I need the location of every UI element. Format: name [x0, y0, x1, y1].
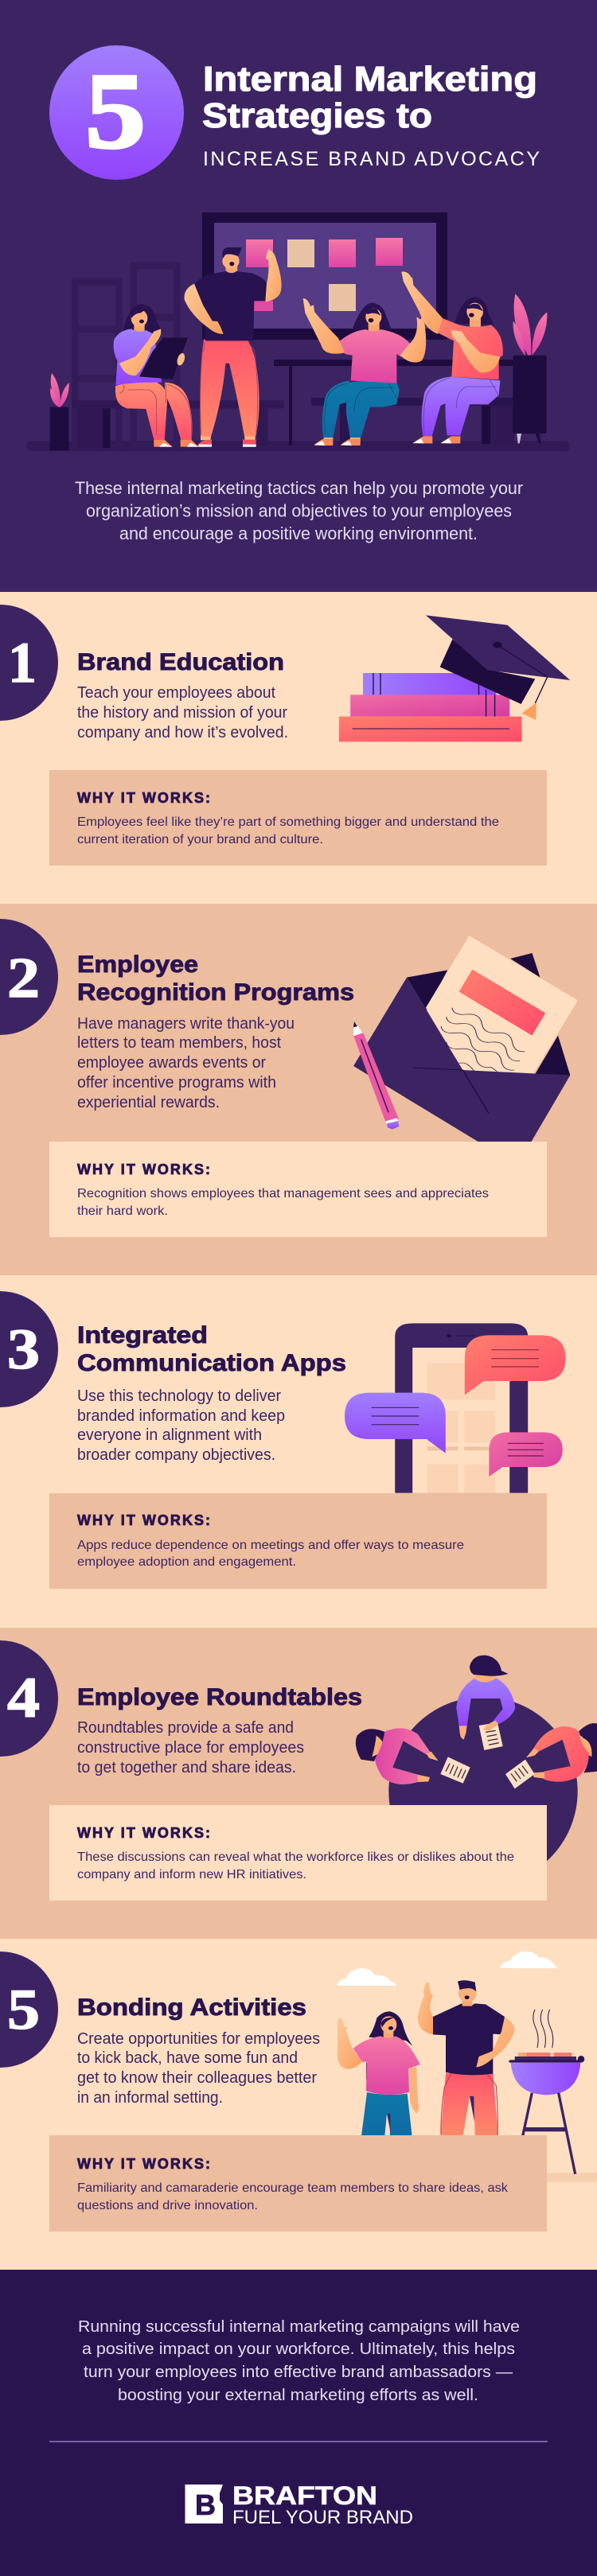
left person — [356, 1728, 470, 1784]
why it works box — [49, 1805, 547, 1901]
why it works box: WHY IT WORKS: — [77, 790, 210, 806]
illustration: team meeting — [26, 212, 570, 451]
top person — [456, 1656, 515, 1750]
panel: strategy 1 brand education — [0, 592, 597, 904]
floor — [26, 441, 570, 451]
why it works box — [49, 1493, 547, 1589]
number badge 2 — [0, 919, 58, 1035]
why it works box: employee adoption and engagement. — [77, 1555, 296, 1569]
logo: Brafton: BRAFTON — [232, 2481, 377, 2510]
body text: offer incentive programs with — [77, 1074, 276, 1091]
body text: branded information and keep — [77, 1407, 285, 1425]
standing man — [184, 247, 282, 447]
heading: Recognition Programs — [77, 979, 354, 1006]
panel: strategy 4 employee roundtables — [0, 1628, 597, 1939]
middle woman — [303, 298, 426, 446]
heading: Brand Education — [77, 649, 284, 675]
closing text — [78, 2317, 520, 2404]
number badge 5: 5 — [7, 1978, 40, 2041]
why it works box: current iteration of your brand and culture. — [77, 833, 323, 846]
logo: Brafton: FUEL YOUR BRAND — [232, 2507, 413, 2528]
body text — [77, 684, 288, 741]
title: Internal Marketing — [203, 60, 537, 99]
large plant — [513, 294, 547, 443]
why it works box — [49, 2135, 547, 2232]
man — [418, 1980, 515, 2136]
intro text: organization’s mission and objectives to your employees — [86, 501, 512, 520]
body text: experiential rewards. — [77, 1094, 220, 1111]
why it works box: WHY IT WORKS: — [77, 2156, 210, 2172]
why it works box: questions and drive innovation. — [77, 2199, 258, 2212]
body text: Create opportunities for employees — [77, 2030, 320, 2048]
intro text: These internal marketing tactics can help you promote your — [75, 478, 523, 498]
title: Strategies to — [202, 96, 432, 135]
number badge 3: 3 — [7, 1317, 40, 1381]
closing text: boosting your external marketing efforts as well. — [118, 2386, 478, 2404]
seated woman with tablet — [114, 304, 199, 447]
body text: letters to team members, host — [77, 1034, 281, 1052]
body text: constructive place for employees — [77, 1739, 304, 1757]
body text: the history and mission of your — [77, 704, 287, 722]
why it works box: Recognition shows employees that management sees and appreciates — [77, 1187, 489, 1200]
closing text: Running successful internal marketing campaigns will have — [78, 2317, 520, 2336]
table and bench — [274, 360, 514, 366]
grill — [509, 2010, 584, 2174]
right person — [505, 1723, 597, 1788]
why it works box — [49, 770, 547, 866]
number badge 1: 1 — [8, 631, 37, 695]
why it works box: WHY IT WORKS: — [77, 1512, 210, 1528]
body text: broader company objectives. — [77, 1446, 275, 1464]
illustration: barbecue with colleagues — [337, 1951, 597, 2182]
body text: get to know their colleagues better — [77, 2069, 317, 2087]
panel: footer — [0, 2270, 597, 2576]
body text: in an informal setting. — [77, 2089, 223, 2107]
why it works box: These discussions can reveal what the workforce likes or dislikes about the — [77, 1850, 514, 1864]
number badge 3 — [0, 1291, 58, 1407]
body text: to get together and share ideas. — [77, 1759, 296, 1776]
body text: company and how it’s evolved. — [77, 724, 288, 741]
illustration: people around a table — [356, 1656, 597, 1885]
why it works box: WHY IT WORKS: — [77, 1825, 210, 1841]
left side of scene — [72, 266, 284, 448]
body text — [77, 2030, 320, 2107]
small plant — [50, 373, 69, 450]
intro text — [75, 478, 523, 543]
body text — [77, 1387, 285, 1464]
illustration: envelope with letter and pencil — [353, 936, 578, 1142]
body text — [77, 1015, 295, 1111]
illustration: phone with chat bubbles — [345, 1323, 566, 1493]
why it works box: company and inform new HR initiatives. — [77, 1868, 306, 1881]
panel: strategy 2 employee recognition programs — [0, 904, 597, 1275]
heading: Integrated — [77, 1322, 208, 1348]
body text — [77, 1719, 304, 1776]
number badge 4: 4 — [7, 1666, 40, 1730]
logo: Brafton: B — [195, 2488, 216, 2521]
why it works box — [49, 1142, 547, 1237]
why it works box: Apps reduce dependence on meetings and offer ways to measure — [77, 1539, 464, 1552]
why it works box: their hard work. — [77, 1204, 168, 1218]
why it works box: Employees feel like they’re part of something bigger and understand the — [77, 815, 499, 829]
body text: employee awards events or — [77, 1054, 266, 1072]
icon: number 5 badge: 5 — [85, 52, 146, 171]
number badge 1 — [0, 605, 58, 721]
people left — [114, 247, 282, 447]
number badge 2: 2 — [7, 946, 40, 1010]
heading — [77, 951, 354, 1006]
why it works box: Familiarity and camaraderie encourage team members to share ideas, ask — [77, 2181, 509, 2195]
number badge 5 — [0, 1951, 58, 2068]
body text: to kick back, have some fun and — [77, 2049, 298, 2067]
panel: strategy 3 integrated communication apps — [0, 1275, 597, 1628]
body text: Use this technology to deliver — [77, 1387, 281, 1405]
body text: Roundtables provide a safe and — [77, 1719, 294, 1737]
body text: Teach your employees about — [77, 684, 275, 702]
panel: hero header — [0, 0, 597, 592]
logo: Brafton — [185, 2481, 413, 2528]
body text: everyone in alignment with — [77, 1426, 262, 1444]
people right — [303, 271, 547, 446]
closing text: turn your employees into effective brand ambassadors — — [84, 2363, 513, 2381]
woman — [338, 2011, 420, 2136]
clouds — [337, 1951, 558, 1986]
panel: strategy 5 bonding activities — [0, 1939, 597, 2270]
right woman — [401, 271, 503, 443]
heading — [77, 1322, 346, 1376]
closing text: a positive impact on your workforce. Ultimately, this helps — [82, 2340, 515, 2358]
presentation board — [202, 212, 447, 340]
why it works box: WHY IT WORKS: — [77, 1162, 210, 1177]
illustration: books and graduation cap — [339, 615, 570, 741]
title — [202, 60, 540, 170]
body text: Have managers write thank-you — [77, 1015, 295, 1033]
heading: Bonding Activities — [77, 1994, 306, 2021]
heading: Employee Roundtables — [77, 1684, 362, 1710]
number badge 4 — [0, 1640, 58, 1757]
title: INCREASE BRAND ADVOCACY — [203, 148, 540, 170]
icon: number 5 badge — [49, 45, 184, 180]
heading: Communication Apps — [77, 1350, 346, 1376]
heading: Employee — [77, 951, 198, 978]
intro text: and encourage a positive working environment. — [119, 523, 478, 543]
